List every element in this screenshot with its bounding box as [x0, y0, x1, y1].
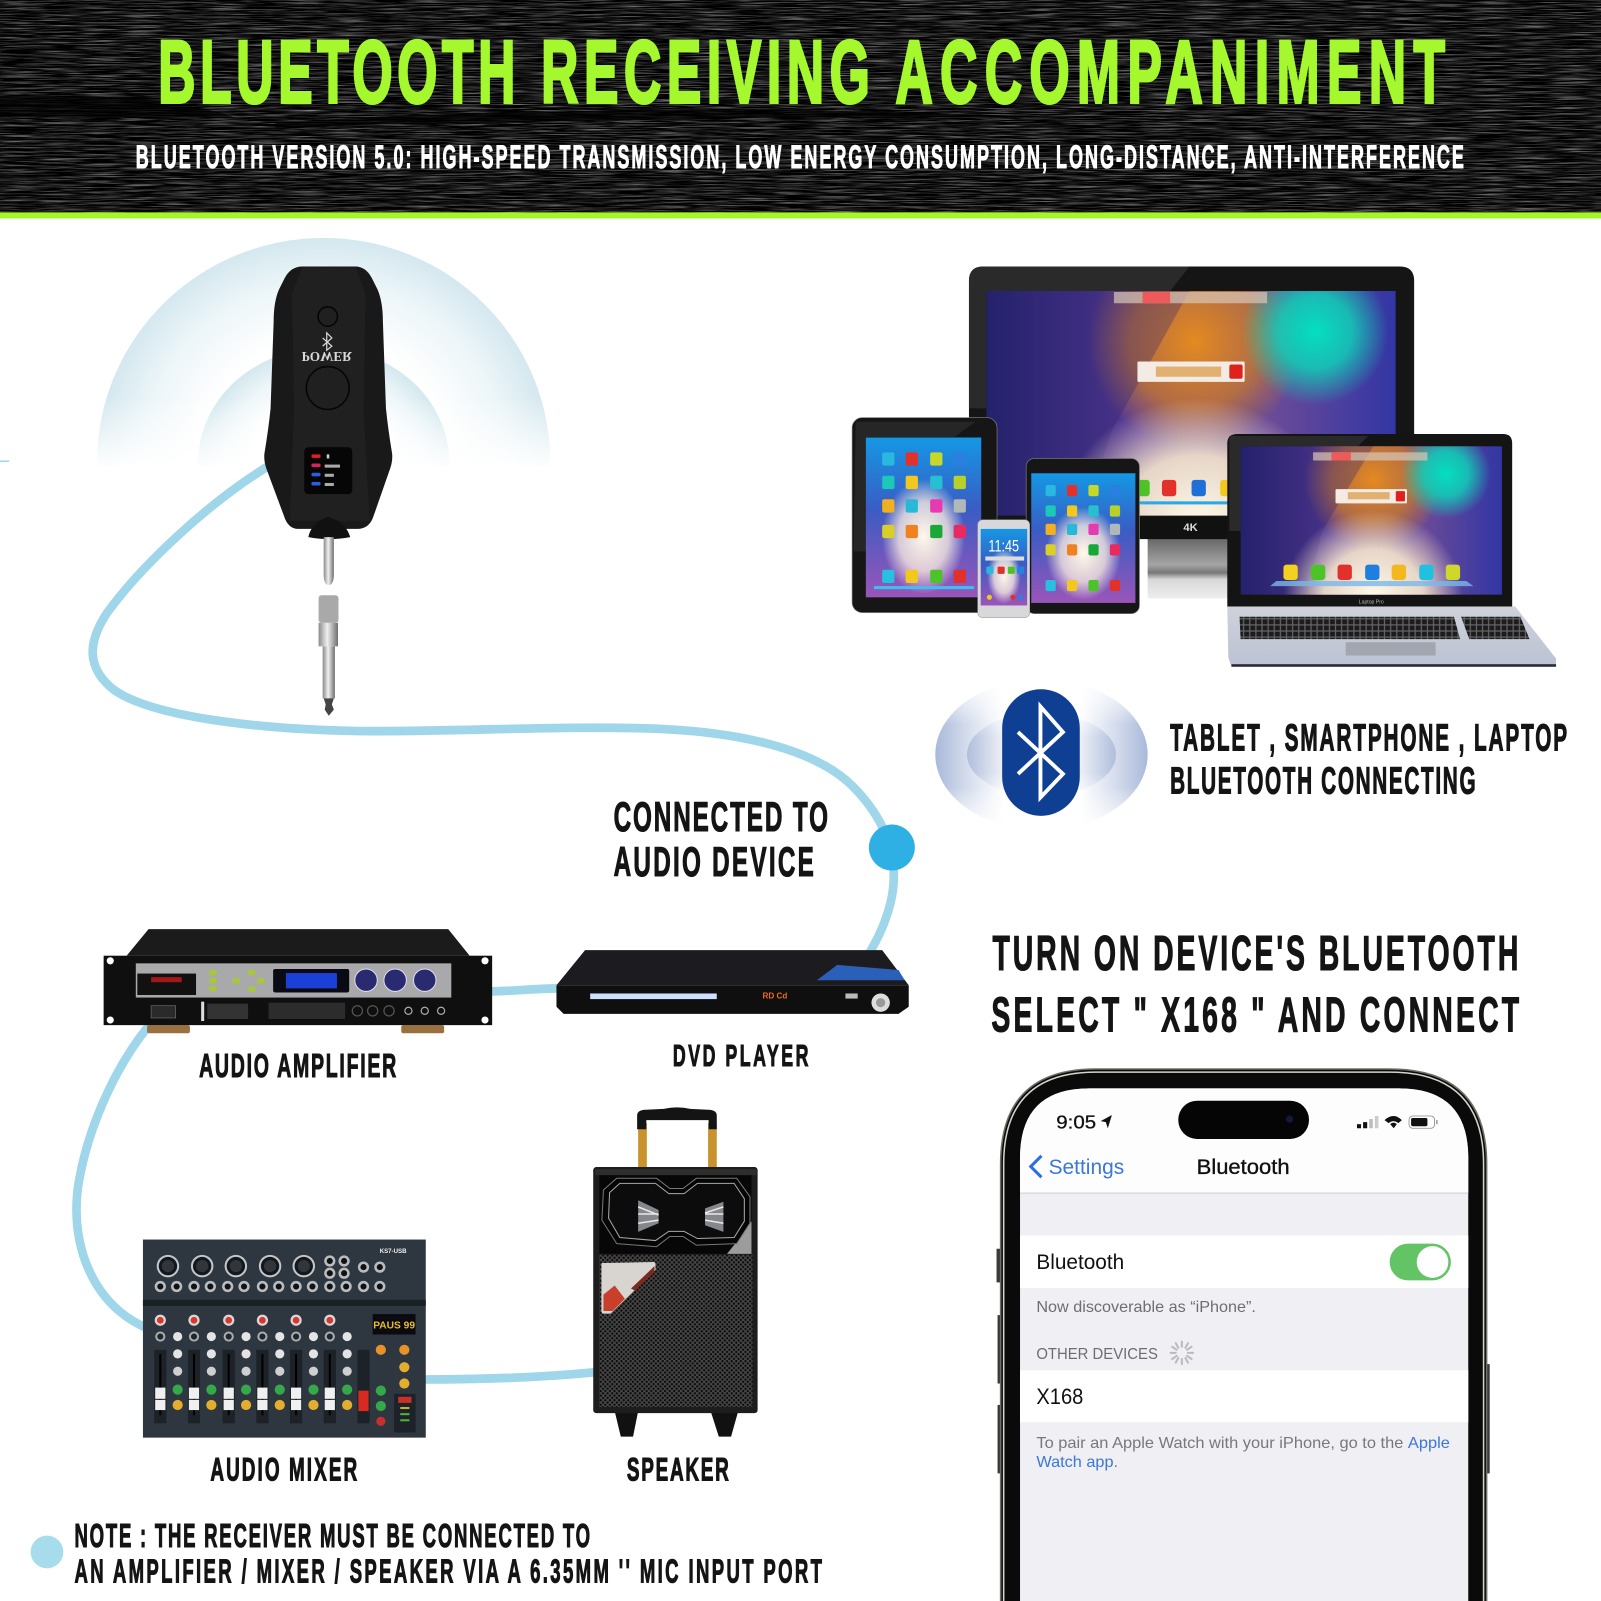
laptop popup — [1336, 489, 1407, 503]
monitor screen — [986, 291, 1396, 516]
title — [158, 23, 1445, 122]
speaker grille — [599, 1255, 753, 1407]
smartphone clock: 11:45 — [988, 537, 1019, 555]
monitor popup — [1137, 361, 1245, 382]
device connection caption — [1170, 717, 1567, 802]
receiver bluetooth mark — [323, 333, 332, 350]
amplifier silver panel — [136, 963, 451, 998]
note marker dot — [31, 1536, 63, 1568]
bluetooth badge — [1002, 689, 1080, 816]
connection dot — [869, 824, 915, 870]
DVD power knob — [845, 993, 890, 1012]
receiver LED panel — [304, 447, 352, 494]
DVD display text: RD Cd — [763, 992, 787, 1001]
laptop keyboard — [1240, 617, 1530, 639]
note text: NOTE : THE RECEIVER MUST BE CONNECTED TO — [75, 1516, 590, 1554]
laptop brand label: Laptop Pro — [1359, 599, 1384, 605]
speaker sticker — [601, 1262, 656, 1314]
title: ACCOMPANIMENT — [895, 23, 1445, 122]
laptop dock icons — [1270, 565, 1473, 586]
instruction heading: TURN ON DEVICE'S BLUETOOTH — [992, 927, 1518, 981]
X168 device name: X168 — [1036, 1384, 1083, 1409]
instruction heading: SELECT " X168 " AND CONNECT — [991, 988, 1519, 1042]
toggle — [1390, 1244, 1451, 1280]
green header rule — [0, 212, 1601, 219]
laptop — [1227, 434, 1556, 667]
smartphone icons — [985, 556, 1024, 600]
tablet — [852, 418, 997, 613]
mixer brand: KS7-USB — [380, 1248, 407, 1255]
monitor dock icons — [1135, 480, 1231, 504]
laptop screen — [1240, 446, 1502, 595]
amplifier buttons — [209, 970, 264, 991]
speaker cabinet — [593, 1167, 758, 1413]
location arrow — [1101, 1115, 1112, 1128]
laptop lid — [1227, 434, 1512, 607]
connected to audio device label: AUDIO DEVICE — [614, 839, 814, 886]
mixer master section — [357, 1314, 416, 1433]
connection cables — [77, 467, 894, 1379]
title: BLUETOOTH — [158, 23, 515, 122]
smartphone — [978, 520, 1030, 618]
3.5mm plug — [324, 537, 334, 585]
devices group — [852, 266, 1556, 667]
apple watch note: Watch app. — [1036, 1454, 1118, 1471]
DVD disc slot — [590, 993, 717, 999]
speaker wheels — [615, 1411, 738, 1437]
monitor 4K badge: 4K — [1183, 522, 1198, 534]
title: RECEIVING — [541, 23, 870, 122]
amplifier knobs — [355, 969, 436, 991]
receiver buttons — [306, 307, 349, 409]
speaker horn — [599, 1175, 751, 1254]
DVD player — [556, 950, 909, 1014]
audio amplifier label: AUDIO AMPLIFIER — [199, 1047, 396, 1085]
laptop menu bar — [1313, 452, 1427, 460]
device connection caption: BLUETOOTH CONNECTING — [1170, 760, 1476, 802]
laptop base — [1227, 607, 1556, 667]
device connection caption: TABLET , SMARTPHONE , LAPTOP — [1170, 717, 1567, 759]
back chevron — [1031, 1156, 1041, 1177]
phone frame — [1001, 1069, 1487, 1601]
monitor — [968, 266, 1414, 598]
signal waves around receiver — [98, 238, 550, 456]
6.35mm adapter plug — [319, 595, 338, 716]
status icons — [1357, 1116, 1438, 1128]
mixer master section: PAUS 99 — [373, 1320, 415, 1331]
instruction heading — [991, 927, 1519, 1042]
X168 device row — [1020, 1370, 1468, 1422]
note text — [75, 1516, 822, 1590]
bluetooth row — [1020, 1235, 1468, 1288]
speaker label: SPEAKER — [627, 1451, 729, 1488]
receiver device — [264, 266, 392, 585]
small tablet — [1026, 458, 1139, 614]
mixer channel strips — [154, 1315, 352, 1423]
phone screen — [1020, 1088, 1468, 1601]
amplifier LCD — [273, 969, 349, 992]
receiver body — [264, 266, 392, 529]
apple watch note: To pair an Apple Watch with your iPhone, go to the Apple — [1036, 1435, 1450, 1452]
receiver collar — [308, 517, 350, 539]
speaker handle — [637, 1107, 717, 1169]
monitor menu bar — [1114, 292, 1267, 303]
bluetooth icon with waves — [935, 689, 1148, 817]
bluetooth rune — [1018, 707, 1063, 797]
amplifier lower controls — [151, 1002, 445, 1021]
small tablet app icons — [1046, 485, 1120, 591]
settings link: Settings — [1049, 1155, 1124, 1179]
stray cable tick — [0, 460, 9, 462]
note text: AN AMPLIFIER / MIXER / SPEAKER VIA A 6.35MM '' MIC INPUT PORT — [75, 1552, 822, 1590]
subtitle: BLUETOOTH VERSION 5.0: HIGH-SPEED TRANSMISSION, LOW ENERGY CONSUMPTION, LONG-DISTANCE, ANTI-INTERFERENCE — [136, 138, 1464, 175]
tablet app icons — [874, 452, 974, 589]
trolley speaker — [593, 1107, 758, 1437]
other devices header: OTHER DEVICES — [1036, 1346, 1158, 1363]
dynamic island — [1178, 1101, 1309, 1139]
header banner: dark wood texture — [0, 0, 1601, 212]
connected to audio device label — [614, 794, 828, 886]
laptop trackpad — [1346, 642, 1436, 656]
mixer jacks — [155, 1255, 385, 1292]
audio amplifier — [104, 929, 492, 1033]
loading spinner — [1171, 1342, 1193, 1364]
discoverable text: Now discoverable as “iPhone”. — [1036, 1299, 1256, 1316]
DVD player label: DVD PLAYER — [673, 1039, 808, 1073]
receiver power label: POWER — [302, 349, 352, 364]
connected to audio device label: CONNECTED TO — [614, 794, 828, 841]
audio mixer label: AUDIO MIXER — [210, 1451, 357, 1488]
status time: 9:05 — [1056, 1112, 1096, 1133]
smartphone mockup — [997, 1069, 1490, 1601]
bluetooth nav title: Bluetooth — [1197, 1155, 1290, 1179]
mixer XLR inputs — [157, 1255, 315, 1277]
apple watch note — [1036, 1435, 1450, 1471]
phone side buttons — [997, 1249, 1490, 1473]
audio mixer — [143, 1240, 426, 1438]
bluetooth row label: Bluetooth — [1036, 1250, 1124, 1274]
